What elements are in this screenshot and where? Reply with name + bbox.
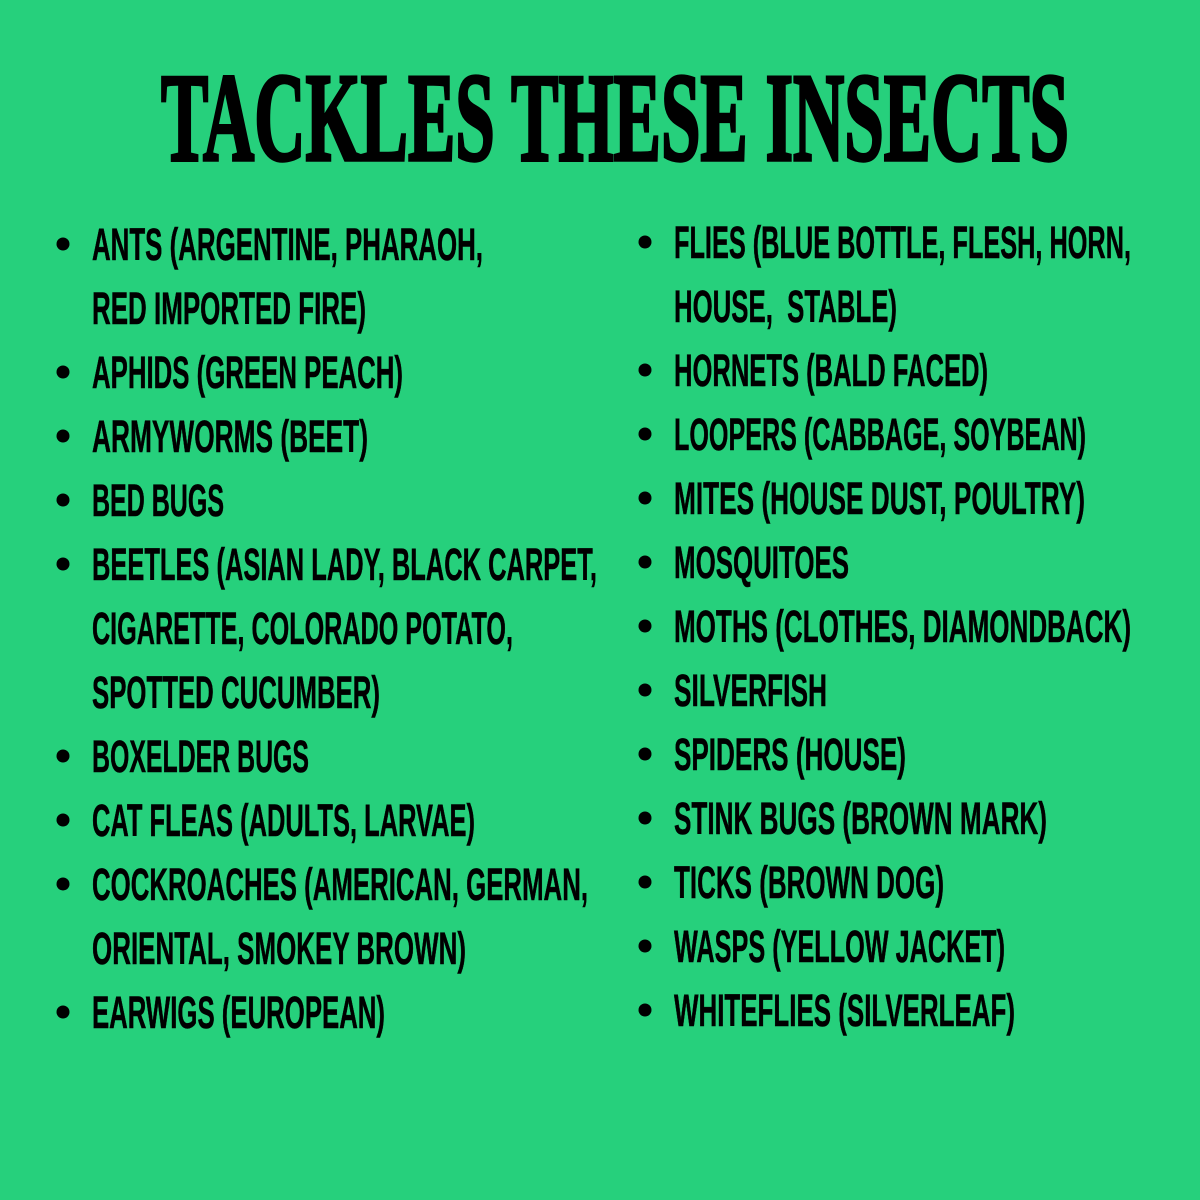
item: hornets	[638, 345, 988, 396]
item: boxelder bugs	[56, 731, 309, 782]
item: armyworms	[56, 411, 368, 462]
item: earwigs: EARWIGS (EUROPEAN)	[92, 987, 385, 1038]
item: ants: ANTS (ARGENTINE, PHARAOH,	[92, 219, 483, 270]
item: armyworms: ARMYWORMS (BEET)	[92, 411, 368, 462]
item: beetles	[56, 539, 597, 718]
item: cockroaches: COCKROACHES (AMERICAN, GERMAN,	[92, 859, 588, 910]
item: earwigs	[56, 987, 385, 1038]
item: aphids: APHIDS (GREEN PEACH)	[92, 347, 403, 398]
item: ticks: TICKS (BROWN DOG)	[674, 857, 944, 908]
item: beetles: CIGARETTE, COLORADO POTATO,	[92, 603, 513, 654]
item: mosquitoes	[638, 537, 849, 588]
item: beetles: SPOTTED CUCUMBER)	[92, 667, 380, 718]
item: ants	[56, 219, 483, 334]
item: aphids	[56, 347, 403, 398]
item: cockroaches: ORIENTAL, SMOKEY BROWN)	[92, 923, 466, 974]
item: stink bugs	[638, 793, 1047, 844]
item: wasps	[638, 921, 1005, 972]
item: silverfish	[638, 665, 827, 716]
item: cat fleas	[56, 795, 475, 846]
item: flies: HOUSE, STABLE)	[674, 281, 897, 332]
item: whiteflies	[638, 985, 1015, 1036]
item: cat fleas: CAT FLEAS (ADULTS, LARVAE)	[92, 795, 475, 846]
item: spiders: SPIDERS (HOUSE)	[674, 729, 906, 780]
item: flies	[638, 217, 1131, 332]
item: cockroaches	[56, 859, 588, 974]
item: ticks	[638, 857, 944, 908]
item: boxelder bugs: BOXELDER BUGS	[92, 731, 309, 782]
item: ants: RED IMPORTED FIRE)	[92, 283, 366, 334]
panel: left column list	[56, 219, 597, 1038]
item: bed bugs: BED BUGS	[92, 475, 224, 526]
item: spiders	[638, 729, 906, 780]
item: bed bugs	[56, 475, 224, 526]
item: beetles: BEETLES (ASIAN LADY, BLACK CARPET,	[92, 539, 597, 590]
panel: right column list	[638, 217, 1131, 1036]
item: silverfish: SILVERFISH	[674, 665, 827, 716]
item: mosquitoes: MOSQUITOES	[674, 537, 849, 588]
